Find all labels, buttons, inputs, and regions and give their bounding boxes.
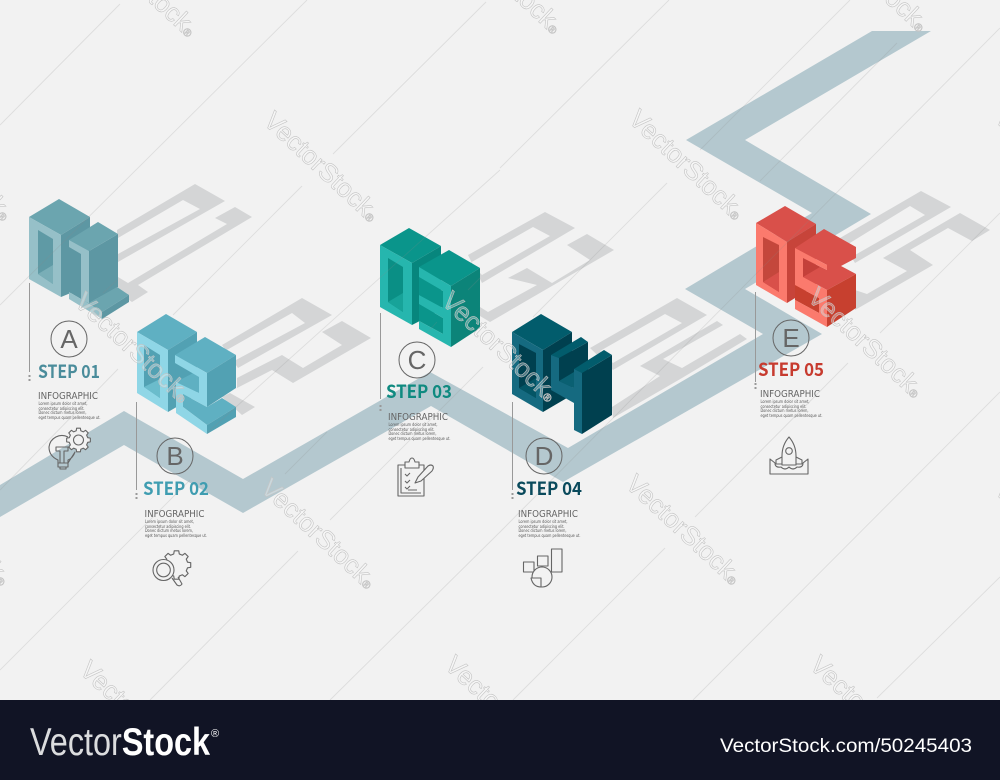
- step E block: [754, 292, 824, 474]
- heading: step 05: STEP 05: [758, 356, 824, 382]
- shadow: 03: [468, 212, 614, 322]
- shadow: 02: [222, 298, 371, 415]
- body text B: eget tempus quam pellentesque ut.: [145, 533, 207, 539]
- body text A: Lorem ipsum dolor sit amet,: [38, 401, 88, 407]
- leader line E: [754, 292, 756, 389]
- leader line D: [512, 402, 514, 499]
- body text A: Donec dictum metus lorem,: [38, 410, 86, 416]
- body text D: Donec dictum metus lorem,: [518, 528, 566, 534]
- repeating VectorStock watermark: VectorStock®: [74, 654, 202, 776]
- body text E: [760, 399, 822, 419]
- shadow: 01: [117, 184, 252, 302]
- repeating VectorStock watermark: VectorStock®: [69, 286, 197, 408]
- step A block: [28, 283, 100, 469]
- body text C: consectetur adipiscing elit.: [388, 427, 434, 433]
- digit 0: [29, 199, 90, 297]
- digit shadows: [117, 184, 990, 418]
- shadow: 04: [590, 298, 747, 418]
- letter badge A: A: [60, 324, 78, 354]
- body text E: eget tempus quam pellentesque ut.: [760, 413, 822, 419]
- icon: rocket launch: [770, 437, 808, 474]
- body text A: eget tempus quam pellentesque ut.: [38, 415, 100, 421]
- registered mark: ®: [211, 728, 219, 740]
- body text B: Lorem ipsum dolor sit amet,: [145, 519, 194, 525]
- icon: bars and pie chart: [524, 549, 562, 587]
- repeating VectorStock watermark: VectorStock®: [620, 468, 748, 590]
- body text C: eget tempus quam pellentesque ut.: [388, 436, 450, 442]
- letter badge B: [157, 438, 193, 474]
- letter badge D: [526, 438, 562, 474]
- leader line B: [136, 402, 138, 499]
- body text C: Lorem ipsum dolor sit amet,: [388, 422, 438, 428]
- heading: step 04: STEP 04: [516, 475, 582, 501]
- body text D: consectetur adipiscing elit.: [518, 524, 564, 530]
- digit 1: [69, 222, 129, 319]
- shadow: 05: [840, 191, 990, 310]
- repeating VectorStock watermark: VectorStock®: [255, 472, 383, 594]
- body text D: Lorem ipsum dolor sit amet,: [518, 519, 568, 525]
- step C block: [380, 313, 452, 496]
- digit 5: [795, 229, 856, 327]
- isometric number 01: [29, 199, 129, 319]
- body text B: Donec dictum metus lorem,: [145, 528, 193, 534]
- body text E: consectetur adipiscing elit.: [760, 404, 806, 410]
- icon: gear and magnifier: [153, 551, 191, 586]
- repeating VectorStock watermark: VectorStock®: [804, 649, 932, 771]
- icon: bulb and gear: [49, 428, 90, 469]
- body text A: consectetur adipiscing elit.: [38, 406, 84, 412]
- isometric number 05: [756, 206, 856, 327]
- body text B: [145, 519, 207, 539]
- body text A: [38, 401, 100, 421]
- letter badge B: B: [166, 441, 184, 471]
- footer logo: VectorStock: [30, 721, 210, 764]
- subheading A: INFOGRAPHIC: [38, 391, 98, 402]
- body text C: [388, 422, 450, 442]
- letter badge A: [51, 321, 87, 357]
- body text E: Donec dictum metus lorem,: [760, 408, 808, 414]
- body text C: Donec dictum metus lorem,: [388, 431, 436, 437]
- digit 0: [380, 228, 441, 325]
- repeating VectorStock watermark: VectorStock®: [258, 105, 386, 227]
- footer bar: [0, 700, 1000, 780]
- body text D: eget tempus quam pellentesque ut.: [518, 533, 580, 539]
- heading: step 03: STEP 03: [386, 378, 452, 404]
- step D block: [512, 402, 582, 587]
- subheading C: INFOGRAPHIC: [388, 412, 448, 423]
- subheading D: INFOGRAPHIC: [518, 509, 578, 520]
- digit 0: [137, 314, 197, 412]
- letter badge C: C: [408, 345, 426, 375]
- letter badge D: D: [535, 441, 553, 471]
- repeating VectorStock watermark: VectorStock®: [436, 285, 564, 407]
- repeating VectorStock watermark: VectorStock®: [623, 103, 751, 225]
- repeating VectorStock watermark: VectorStock®: [439, 649, 567, 771]
- step B block: [136, 402, 209, 586]
- letter badge E: [773, 320, 809, 356]
- body text B: consectetur adipiscing elit.: [145, 524, 191, 530]
- isometric number 03: [380, 228, 480, 347]
- letter badge C: [399, 342, 435, 378]
- heading: step 01: STEP 01: [38, 358, 100, 384]
- digit 0: [756, 206, 816, 303]
- digit 2: [175, 337, 236, 434]
- body text D: [518, 519, 580, 539]
- letter badge E: E: [782, 323, 800, 353]
- digit 3: [419, 250, 480, 347]
- digit 0: [512, 314, 572, 412]
- footer image id: VectorStock.com/50245403: [720, 736, 972, 757]
- repeating VectorStock watermark: VectorStock®: [802, 281, 930, 403]
- heading: step 02: STEP 02: [143, 475, 209, 501]
- subheading E: INFOGRAPHIC: [760, 389, 820, 400]
- body text E: Lorem ipsum dolor sit amet,: [760, 399, 810, 405]
- zigzag road path: [0, 31, 931, 517]
- leader line A: [28, 283, 30, 381]
- isometric number 02: [137, 314, 236, 434]
- leader line C: [380, 313, 382, 411]
- isometric number 04: [512, 314, 612, 434]
- subheading B: INFOGRAPHIC: [144, 509, 205, 520]
- digit 4: [551, 337, 612, 434]
- icon: clipboard with pen: [398, 458, 433, 496]
